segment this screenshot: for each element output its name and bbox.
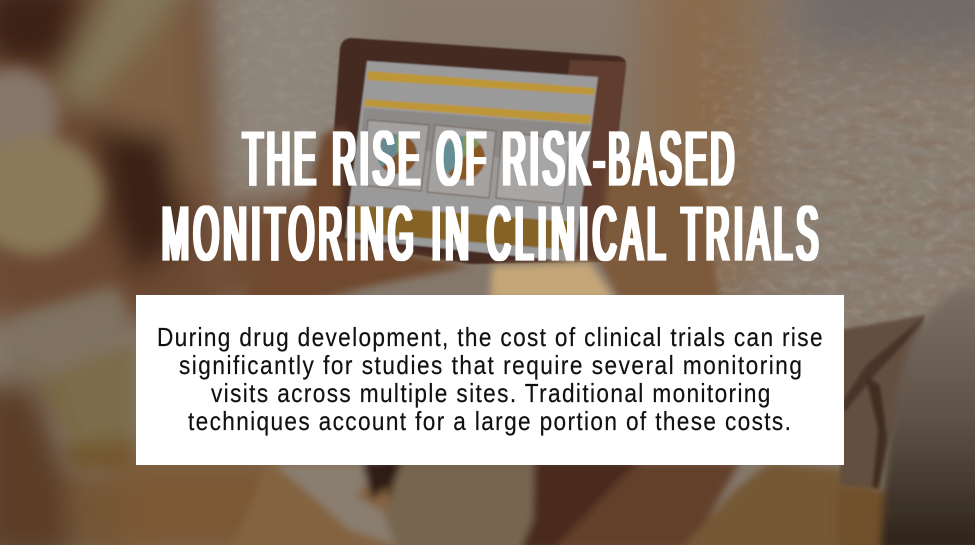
- bottom clothing: [230, 460, 885, 546]
- hand right and glow: [490, 150, 720, 300]
- intro paragraph: techniques account for a large portion of these costs.: [188, 408, 791, 436]
- sand tones: [220, 0, 975, 320]
- tablet screen: [345, 61, 598, 262]
- title line 1: THE RISE OF RISK-BASED: [243, 116, 734, 202]
- hand left of tablet: [240, 125, 470, 300]
- chart panels: [361, 120, 429, 191]
- sand texture: [700, 38, 975, 324]
- tablet: [326, 38, 626, 264]
- bottom yellow block: [347, 205, 575, 250]
- left blurred foreground: [0, 0, 225, 320]
- pie charts: [377, 134, 417, 174]
- intro paragraph: [157, 324, 823, 436]
- panel background: [136, 295, 844, 465]
- tablet frame: [326, 38, 626, 264]
- right jacket and knee: [840, 315, 925, 490]
- intro paragraph: significantly for studies that require several monitoring: [179, 352, 802, 380]
- title: [162, 116, 818, 277]
- intro paragraph: During drug development, the cost of clinical trials can rise: [157, 324, 823, 352]
- text panel: [136, 295, 844, 465]
- bokeh lights: [0, 68, 136, 475]
- screen stripes: [367, 71, 595, 95]
- intro paragraph: visits across multiple sites. Traditional monitoring: [211, 380, 770, 408]
- title line 2: MONITORING IN CLINICAL TRIALS: [162, 191, 818, 277]
